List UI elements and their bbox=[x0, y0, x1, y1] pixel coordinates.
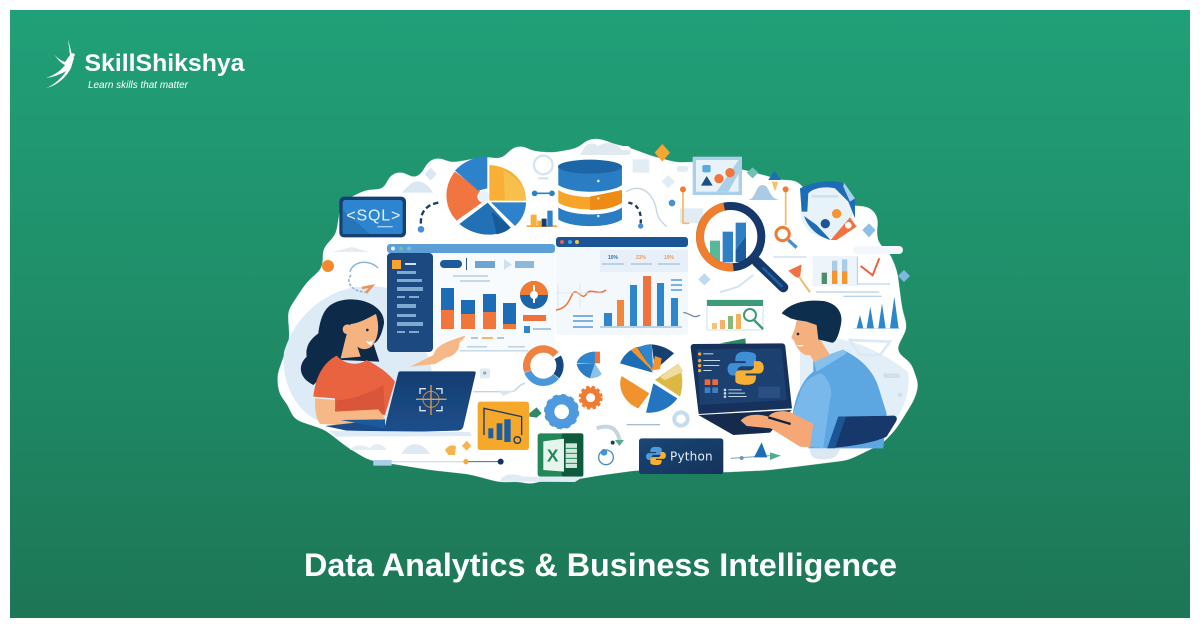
column chart bbox=[600, 276, 682, 328]
pale cloud beneath excel bbox=[500, 474, 583, 482]
icon: link arrow bbox=[533, 191, 554, 195]
stacked bar chart bbox=[441, 288, 516, 329]
small decorative icons bbox=[747, 167, 781, 200]
orange gear bbox=[580, 387, 601, 408]
donut chart bbox=[520, 342, 567, 389]
python logo on screen bbox=[728, 352, 764, 385]
gauge icon bbox=[520, 281, 548, 309]
woman with laptop bbox=[301, 299, 602, 482]
tagline: Learn skills that matter bbox=[88, 79, 188, 91]
refresh arrow bbox=[349, 262, 378, 293]
left dashboard window bbox=[387, 244, 582, 352]
toolbar bbox=[440, 258, 582, 282]
small chart panel bbox=[773, 256, 890, 297]
KPI cards: 19% bbox=[664, 255, 675, 261]
column sparkline bbox=[853, 297, 900, 329]
pale stool bbox=[810, 448, 840, 459]
screen menu bbox=[698, 352, 780, 398]
hair bbox=[782, 301, 841, 343]
picture frame bbox=[693, 157, 742, 195]
neck and face bbox=[791, 320, 830, 362]
icon: small magnifier bbox=[776, 227, 797, 248]
pale blue area behind man bbox=[800, 337, 909, 440]
large magnifier with bars bbox=[697, 203, 783, 287]
pale surface under laptop bbox=[328, 431, 472, 437]
icon: leaping figure bbox=[46, 39, 75, 88]
brand logo bbox=[46, 39, 245, 91]
icon: pale robot bbox=[534, 156, 553, 178]
central illustration bbox=[278, 143, 918, 484]
KPI cards: 23% bbox=[636, 255, 647, 261]
pie chart bbox=[446, 157, 526, 235]
exploded pie chart bbox=[620, 344, 683, 413]
facial details bbox=[366, 329, 373, 345]
mini legends bbox=[523, 315, 593, 333]
pale backdrop doodles bbox=[850, 340, 902, 397]
database cylinder bbox=[558, 160, 622, 226]
dashed connector right bbox=[626, 188, 675, 229]
forearm and hands bbox=[741, 411, 813, 447]
white cloud backdrop bbox=[278, 143, 918, 484]
shirt bbox=[793, 350, 887, 448]
sidebar bbox=[387, 253, 433, 352]
python tile bbox=[639, 438, 723, 474]
network arrow doodle bbox=[731, 442, 781, 460]
excel logo bbox=[538, 433, 583, 477]
icon: dashed connector bbox=[418, 203, 438, 233]
green page behind laptop bbox=[720, 338, 746, 345]
pin line right bbox=[783, 186, 789, 225]
python label: Python bbox=[670, 449, 713, 463]
orange dot bbox=[322, 260, 334, 272]
shirt shadow bbox=[335, 385, 385, 413]
pale skyline bbox=[332, 247, 370, 252]
laptop emblem bbox=[416, 385, 447, 415]
face bbox=[341, 314, 378, 358]
collar bbox=[813, 349, 847, 372]
top cloud tail bbox=[600, 146, 631, 154]
icon: small cloud and sparkle bbox=[402, 167, 437, 193]
right dashboard window bbox=[460, 237, 688, 352]
forearm bbox=[315, 398, 385, 425]
shirt bbox=[313, 356, 395, 415]
pen bbox=[768, 417, 791, 424]
ring badge icon bbox=[800, 181, 857, 240]
line chart bbox=[556, 283, 606, 310]
chair bbox=[827, 416, 897, 448]
SQL label: <SQL> bbox=[346, 208, 400, 225]
power BI tile bbox=[478, 402, 542, 450]
icon: SQL tile bbox=[339, 197, 406, 237]
upper-right icons bbox=[626, 144, 910, 297]
sleeve shading bbox=[793, 373, 831, 448]
icon: orange sparkle bbox=[655, 144, 670, 162]
brand name: SkillShikshya bbox=[84, 50, 245, 77]
small pie bbox=[577, 352, 602, 378]
mouse and doodles bbox=[473, 368, 525, 396]
hair bbox=[301, 299, 384, 385]
pale blue area behind woman bbox=[283, 286, 440, 424]
window title bar bbox=[556, 237, 688, 247]
mini bar chart bbox=[527, 211, 557, 227]
decor: cloud top bbox=[580, 143, 631, 155]
excel X letter: X bbox=[547, 445, 559, 465]
title: Data Analytics & Business Intelligence bbox=[304, 547, 897, 583]
right edge tail bbox=[853, 246, 903, 254]
KPI cards bbox=[600, 250, 688, 272]
pin line left bbox=[680, 186, 689, 223]
pale trend line bbox=[720, 275, 753, 292]
eye and smile bbox=[797, 333, 804, 347]
left doodle and python-side bits bbox=[597, 313, 700, 465]
python logo bbox=[646, 447, 666, 465]
window title bar bbox=[387, 244, 555, 253]
icon: pale doc and sparkles bbox=[633, 159, 703, 223]
green data chart card bbox=[707, 300, 763, 330]
left doodles bbox=[322, 247, 378, 293]
icon: orange push pin bbox=[788, 264, 810, 292]
sparkles bbox=[698, 223, 910, 285]
caption lines bbox=[460, 337, 528, 352]
decor: timeline with nodes bbox=[350, 441, 504, 466]
KPI cards: 10% bbox=[608, 255, 619, 261]
laptop bbox=[325, 371, 476, 433]
laptop bbox=[691, 343, 792, 435]
pointing arm bbox=[410, 336, 465, 367]
blue gear bbox=[546, 396, 578, 428]
man with laptop bbox=[597, 297, 902, 474]
upper-left icons bbox=[339, 156, 622, 237]
